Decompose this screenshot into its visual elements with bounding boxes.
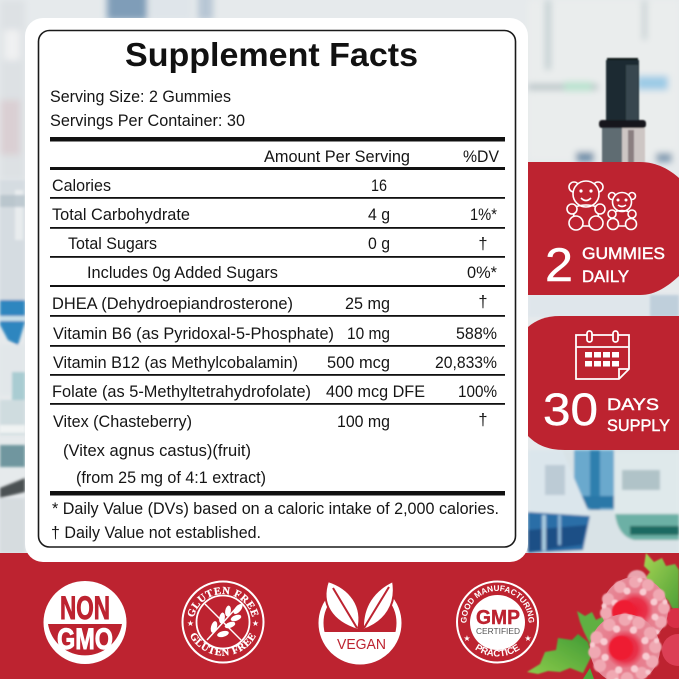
- leaf: top right: [642, 553, 679, 612]
- table rows: †: [478, 293, 488, 311]
- table rows: Calories: [52, 177, 111, 195]
- table rows: (Vitex agnus castus)(fruit): [63, 442, 251, 460]
- serving info: Servings Per Container: 30: [50, 112, 245, 130]
- label: gummies daily: GUMMIES: [582, 244, 665, 263]
- raspberry: top small: [627, 570, 647, 590]
- table rows: †: [478, 411, 488, 429]
- badge: GMP certified: [456, 580, 539, 664]
- badge: non GMO: [44, 581, 126, 664]
- badge: GMP certified: ★: [524, 634, 532, 643]
- badge: GMP certified: GOOD MANUFACTURING: [460, 585, 534, 623]
- table rows: 0 g: [368, 235, 390, 253]
- table rows: 10 mg: [347, 325, 390, 343]
- badge: gluten free: GLUTEN FREE: [190, 632, 256, 656]
- microscope eyepiece: [599, 58, 646, 164]
- panel: 30 days supply: [528, 316, 679, 450]
- table rows: [52, 177, 498, 487]
- number 2: 2: [545, 238, 573, 291]
- leaf: bottom stem: [583, 668, 594, 679]
- red footer band: [0, 553, 679, 679]
- footnotes: [51, 500, 499, 542]
- label: days supply: DAYS: [607, 395, 659, 414]
- panel: white card: [25, 18, 528, 562]
- table rows: Vitamin B6 (as Pyridoxal-5-Phosphate): [53, 325, 334, 343]
- table rows: 100%: [458, 383, 497, 401]
- table rows: 100 mg: [337, 413, 390, 431]
- table rows: Vitamin B12 (as Methylcobalamin): [53, 354, 298, 372]
- table rows: 4 g: [368, 206, 390, 224]
- serving info: [50, 88, 245, 130]
- panel: supplement facts table: [38, 30, 516, 547]
- badge: gluten free: GLUTEN FREE: [188, 586, 259, 617]
- panel: 2 gummies daily: [528, 162, 679, 295]
- badge: non GMO: NON: [60, 590, 110, 626]
- label: gummies daily: DAILY: [582, 267, 629, 286]
- table rows: Vitex (Chasteberry): [53, 413, 192, 431]
- badge: gluten free: [182, 580, 264, 664]
- badge: vegan: VEGAN: [337, 637, 386, 653]
- raspberry: right: [662, 608, 679, 666]
- footnotes: * Daily Value (DVs) based on a caloric intake of 2,000 calories.: [52, 500, 499, 518]
- serving info: Serving Size: 2 Gummies: [50, 88, 231, 106]
- table rows: 25 mg: [345, 295, 390, 313]
- footnotes: † Daily Value not established.: [51, 524, 261, 542]
- badge: GMP certified: GMP: [476, 607, 520, 629]
- badge: GMP certified: CERTIFIED: [476, 627, 520, 636]
- table rows: 1%*: [470, 206, 498, 224]
- table rows: Includes 0g Added Sugars: [87, 264, 278, 282]
- icon: gummy bears: [567, 181, 636, 230]
- table header: Amount Per Serving: [264, 148, 410, 166]
- illustration: raspberries and leaves: [527, 553, 679, 679]
- icon: leaves: [326, 581, 394, 630]
- table rules: [50, 137, 505, 496]
- title: Supplement Facts: [125, 36, 418, 73]
- number 30: 30: [543, 384, 598, 435]
- table rows: Total Carbohydrate: [52, 206, 190, 224]
- leaf: middle: [577, 611, 608, 650]
- badge: GMP certified: ★: [463, 634, 471, 643]
- icon: crossed wheat: [205, 602, 244, 640]
- raspberry: upper: [600, 576, 670, 644]
- table rows: †: [478, 235, 488, 253]
- table rows: 16: [371, 177, 387, 195]
- table header: %DV: [463, 148, 499, 166]
- table rows: 20,833%: [435, 354, 497, 372]
- table header: [264, 148, 499, 166]
- badge: vegan: [321, 576, 399, 662]
- badge: GMP certified: PRACTICE: [475, 644, 520, 656]
- table rows: 400 mcg DFE: [326, 383, 425, 401]
- table rows: (from 25 mg of 4:1 extract): [76, 469, 266, 487]
- leaf: left: [527, 634, 592, 674]
- table rows: DHEA (Dehydroepiandrosterone): [52, 295, 293, 313]
- badge: gluten free: ★: [187, 619, 194, 628]
- label: days supply: SUPPLY: [607, 416, 670, 435]
- icon: calendar: [576, 331, 629, 379]
- table rows: 500 mcg: [327, 354, 390, 372]
- badge: non GMO: GMO: [57, 623, 113, 656]
- badge: gluten free: ★: [252, 619, 259, 628]
- raspberry: lower: [588, 613, 662, 679]
- table rows: Folate (as 5-Methyltetrahydrofolate): [52, 383, 311, 401]
- table rows: 588%: [456, 325, 497, 343]
- table rows: 0%*: [467, 264, 498, 282]
- table rows: Total Sugars: [68, 235, 157, 253]
